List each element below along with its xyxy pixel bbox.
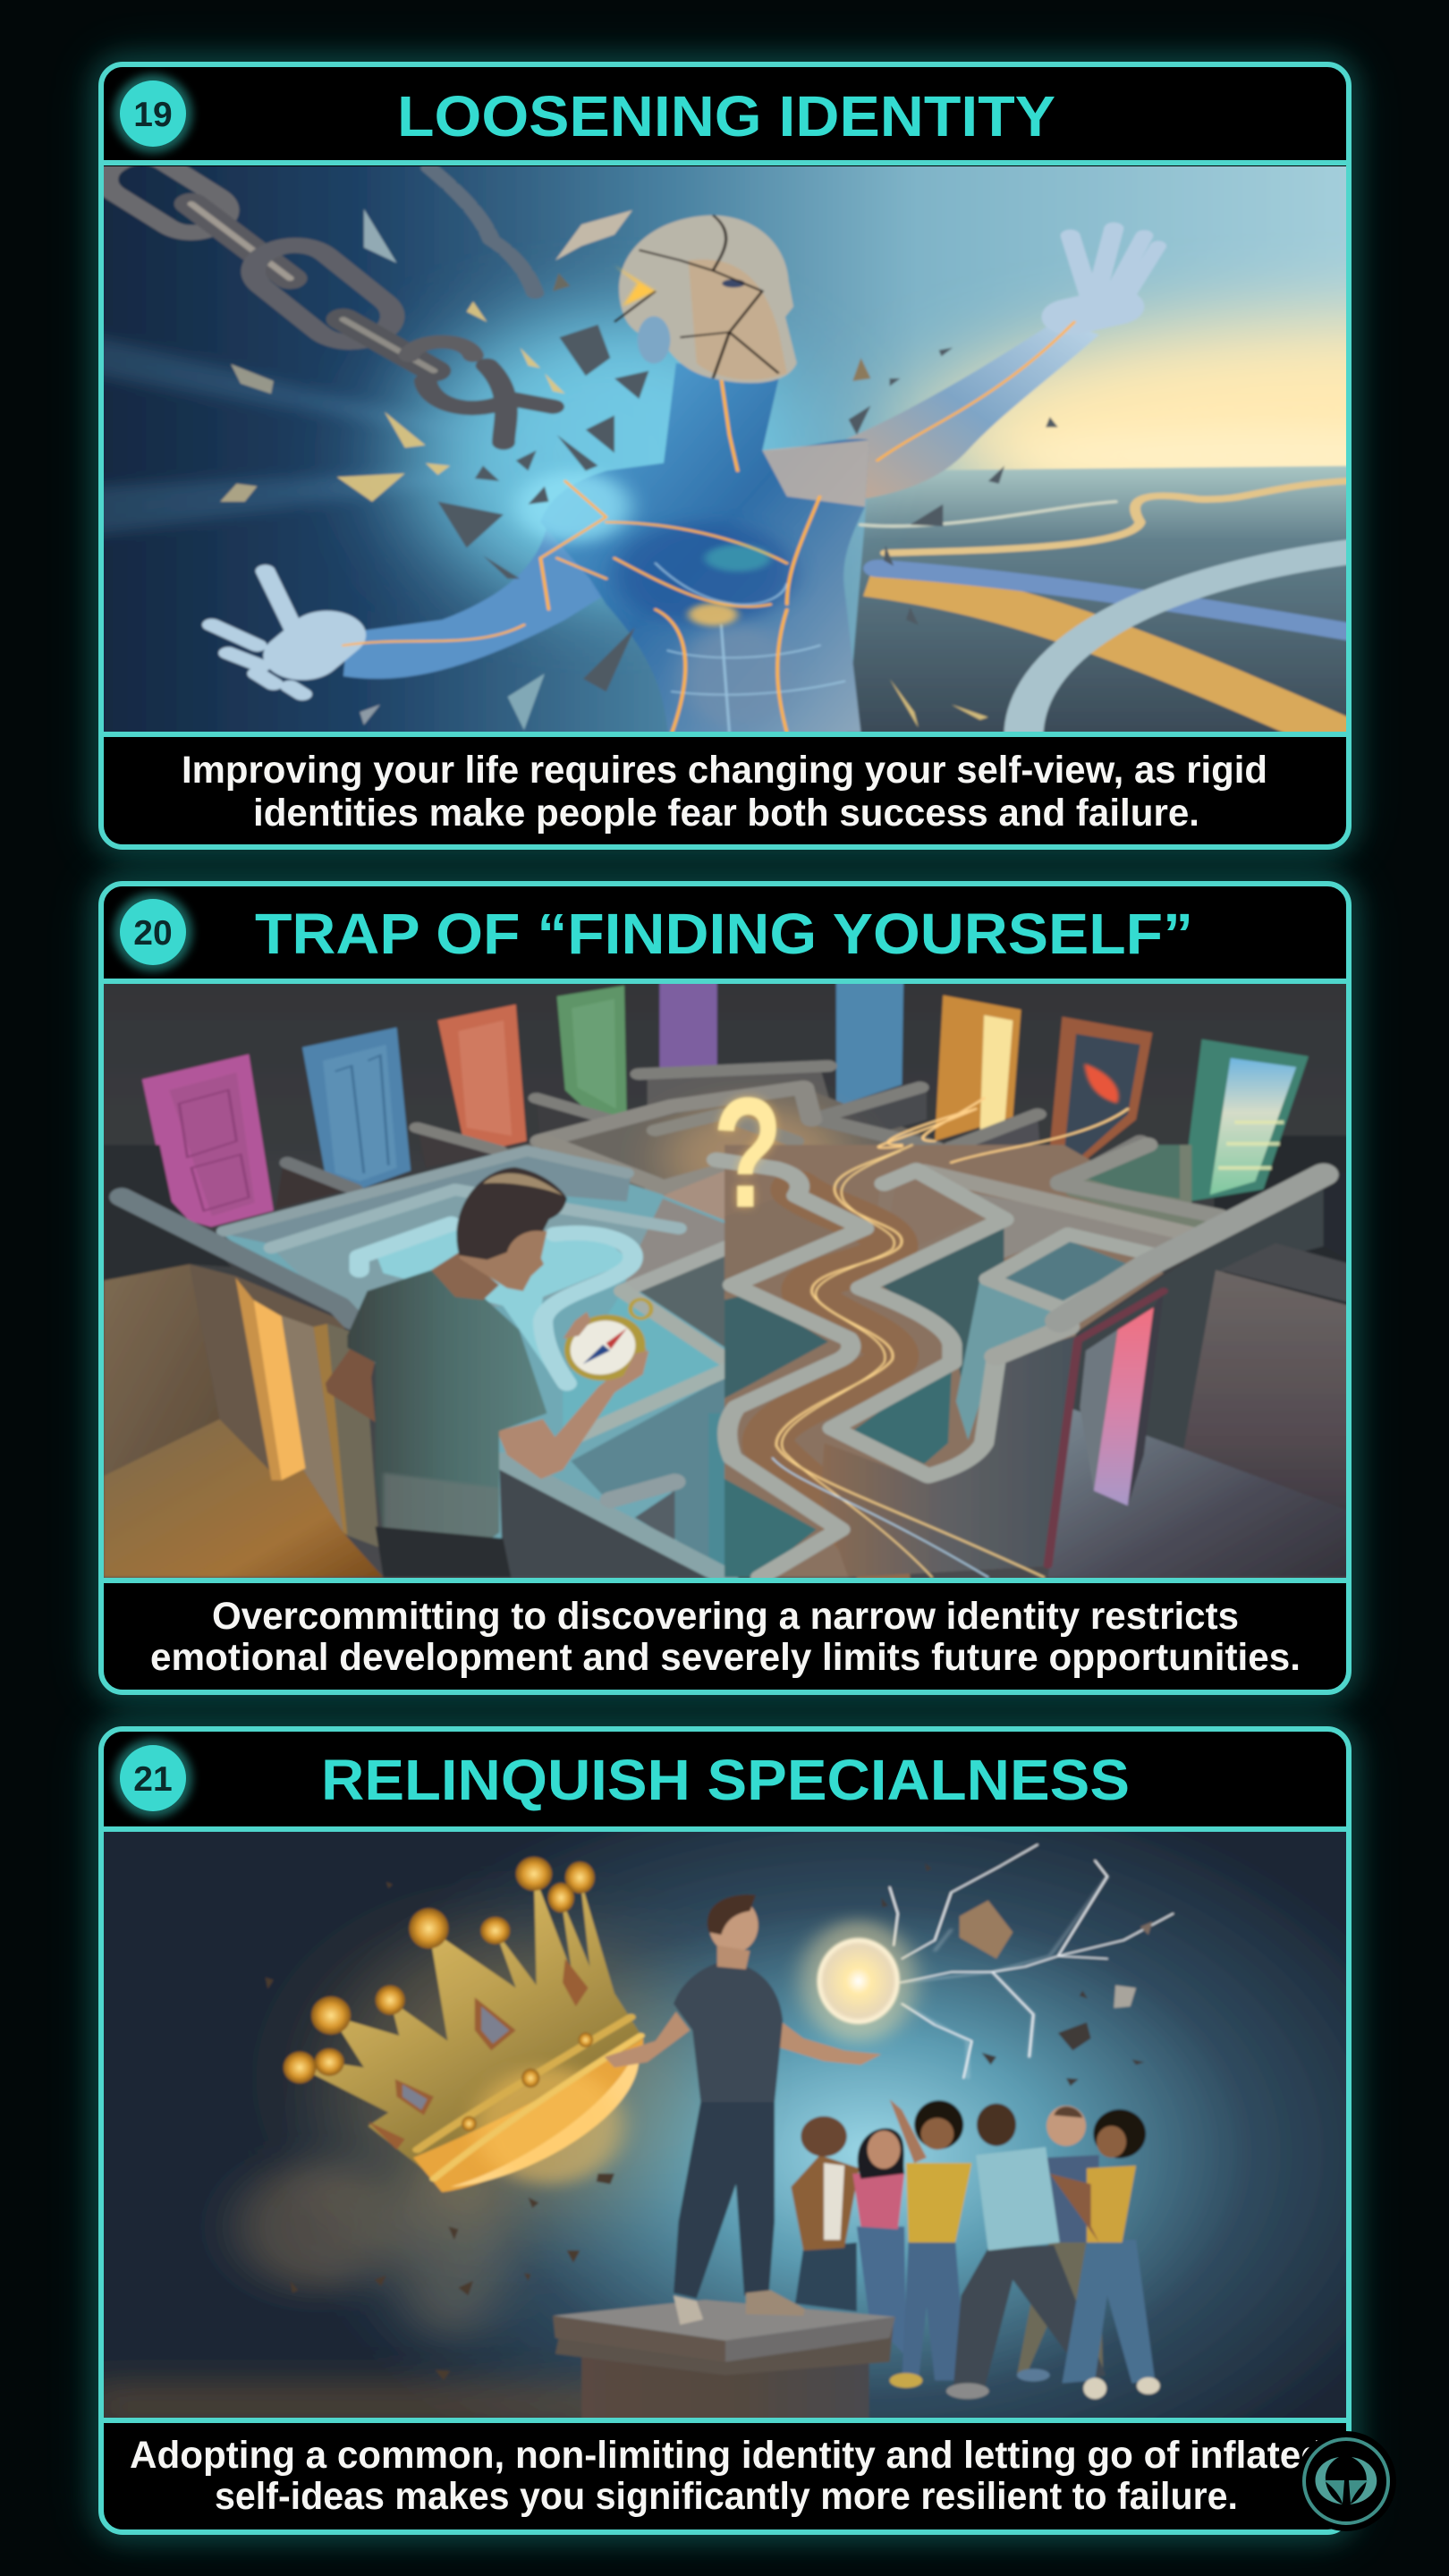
caption 20 bbox=[150, 1595, 1301, 1679]
upper maze walls bbox=[418, 1125, 499, 1168]
panel 21 frame bbox=[101, 1729, 1349, 2532]
lightning bbox=[902, 1877, 1107, 2078]
heading: loosening identity: LOOSENING IDENTITY bbox=[397, 84, 1055, 148]
caption 21 bbox=[130, 2434, 1324, 2518]
right half of maze bbox=[716, 1145, 1351, 1577]
heading: trap of finding yourself: TRAP OF “FINDING YOURSELF” bbox=[255, 902, 1193, 966]
number badge 19: 19 bbox=[133, 96, 173, 134]
neck and torso bbox=[540, 363, 869, 733]
roads bbox=[869, 579, 1368, 748]
logo badge bbox=[1296, 2431, 1396, 2531]
man on pedestal bbox=[605, 1894, 881, 2325]
debris and rocks bbox=[266, 1882, 614, 2380]
crowd bbox=[791, 2099, 1160, 2399]
caption 21: self-ideas makes you significantly more resilient to failure. bbox=[215, 2475, 1238, 2518]
faint chain bbox=[429, 168, 537, 296]
big chain bbox=[92, 148, 553, 443]
illustration: shattering figure bbox=[104, 166, 1346, 732]
left half of maze bbox=[104, 1145, 733, 1577]
orb bbox=[801, 1920, 916, 2042]
number badge 20 bbox=[114, 893, 192, 971]
question mark: ? bbox=[713, 1066, 783, 1241]
number badge 20: 20 bbox=[133, 914, 173, 953]
caption 19: Improving your life requires changing your self-view, as rigid bbox=[182, 749, 1267, 792]
threads of light bbox=[776, 1145, 1044, 1577]
veins bbox=[343, 322, 1074, 733]
head bbox=[619, 216, 797, 383]
right arm bbox=[844, 319, 1099, 502]
illustration: falling crown bbox=[80, 1824, 1368, 2460]
caption 20: Overcommitting to discovering a narrow identity restricts bbox=[212, 1595, 1239, 1638]
question mark: ? bbox=[713, 1066, 783, 1241]
panel 20 frame bbox=[101, 884, 1349, 1692]
man with compass bbox=[326, 1167, 657, 1577]
panel 19 frame bbox=[101, 64, 1349, 847]
panel 19: loosening identity bbox=[80, 64, 1449, 847]
upper threads bbox=[878, 1098, 1128, 1163]
number badge 21: 21 bbox=[133, 1760, 173, 1799]
caption 20: emotional development and severely limits future opportunities. bbox=[150, 1636, 1301, 1679]
back wall and doors bbox=[80, 975, 1370, 1618]
panel 20: trap of finding yourself bbox=[80, 884, 1370, 1692]
caption 21: Adopting a common, non-limiting identity and letting go of inflated bbox=[130, 2434, 1324, 2477]
pedestal bbox=[553, 2300, 895, 2423]
left arm and hand bbox=[342, 530, 601, 681]
floating rocks bbox=[881, 1863, 1152, 2086]
number badge 19 bbox=[114, 74, 192, 153]
crown bbox=[284, 1857, 643, 2192]
number badge 21 bbox=[114, 1739, 192, 1818]
caption 19 bbox=[182, 749, 1267, 835]
illustration: maze of doors bbox=[80, 975, 1370, 1618]
panel 21: relinquish specialness bbox=[80, 1729, 1368, 2532]
caption 19: identities make people fear both success and failure. bbox=[253, 792, 1199, 835]
shards bbox=[220, 209, 988, 730]
heading: relinquish specialness: RELINQUISH SPECIALNESS bbox=[321, 1748, 1130, 1812]
